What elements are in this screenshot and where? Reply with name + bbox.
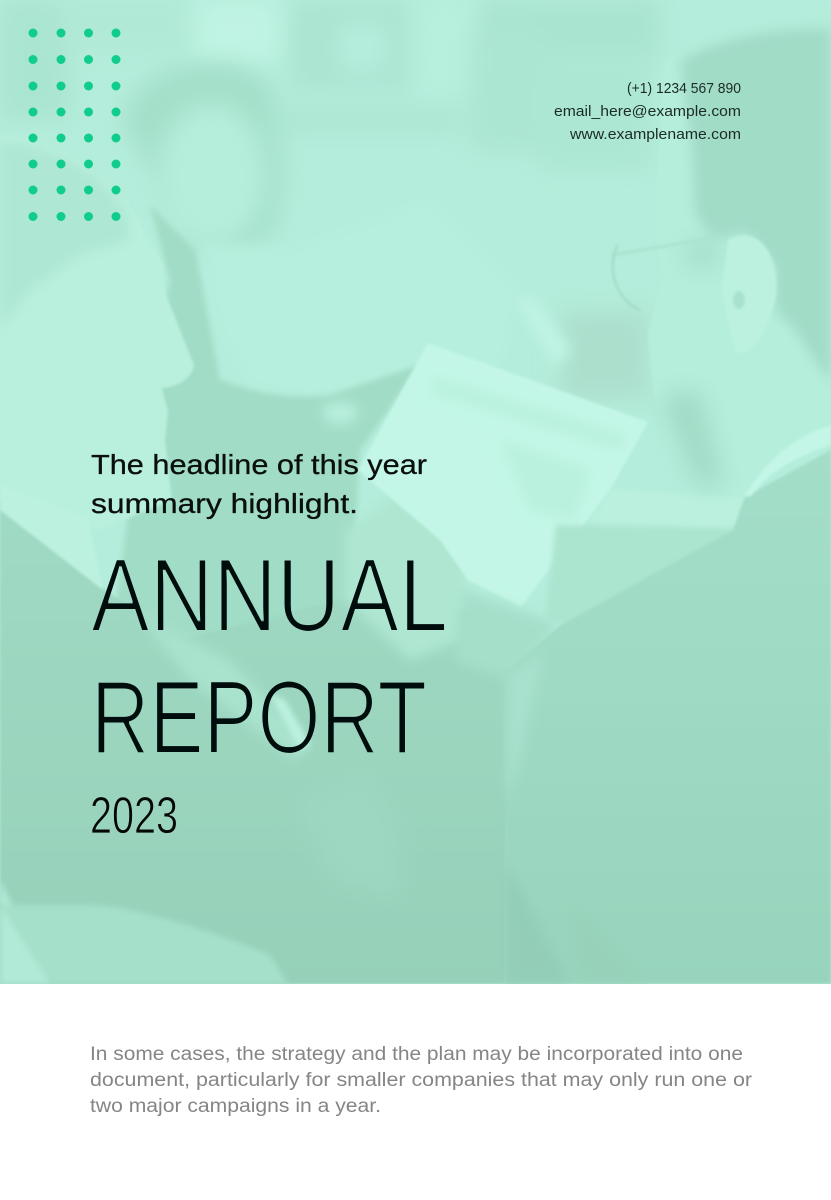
footer description xyxy=(90,1044,753,1117)
contact details: www.examplename.com xyxy=(569,127,741,143)
headline: The headline of this year xyxy=(91,449,427,480)
headline: summary highlight. xyxy=(91,488,358,519)
right man lapel xyxy=(511,668,632,984)
right man shirt collar xyxy=(745,425,831,497)
contact details: email_here@example.com xyxy=(554,104,741,120)
tablet held between the men xyxy=(358,343,648,607)
bottom-left sleeve xyxy=(0,880,288,984)
area beneath tablet xyxy=(462,594,554,671)
left man collar xyxy=(0,484,103,590)
right man ear xyxy=(726,236,776,312)
right foreground man jacket xyxy=(505,450,831,984)
title: annual report: REPORT xyxy=(91,660,427,776)
footer description: two major campaigns in a year. xyxy=(90,1096,381,1117)
right man head xyxy=(648,25,831,497)
left man hair xyxy=(4,146,124,310)
right man hair xyxy=(680,28,831,385)
title: annual report xyxy=(91,538,448,776)
table band behind tablet xyxy=(548,524,728,622)
contact details: (+1) 1234 567 890 xyxy=(627,81,741,97)
title: annual report: ANNUAL xyxy=(91,538,448,654)
left man sleeve highlight xyxy=(156,629,301,756)
tablet printed lines xyxy=(514,452,581,512)
tablet hand xyxy=(347,505,459,658)
blurred office background xyxy=(0,0,660,400)
headline xyxy=(91,449,427,519)
light shirt of background man xyxy=(224,251,229,254)
blurred hand highlight xyxy=(322,296,572,424)
year: 2023 xyxy=(90,787,178,845)
right man beard xyxy=(664,243,723,486)
dark shadow beside left man xyxy=(116,210,414,638)
glasses xyxy=(612,244,675,310)
contact details xyxy=(554,81,741,143)
background man face xyxy=(157,103,267,247)
footer description: document, particularly for smaller companies that may only run one or xyxy=(90,1070,753,1091)
footer description: In some cases, the strategy and the plan may be incorporated into one xyxy=(90,1044,743,1065)
left man jacket xyxy=(0,500,510,984)
left foreground man head xyxy=(125,294,194,518)
left man cuff and hand xyxy=(300,770,400,900)
blurred background man xyxy=(125,63,282,252)
decorative dot grid xyxy=(28,28,120,221)
